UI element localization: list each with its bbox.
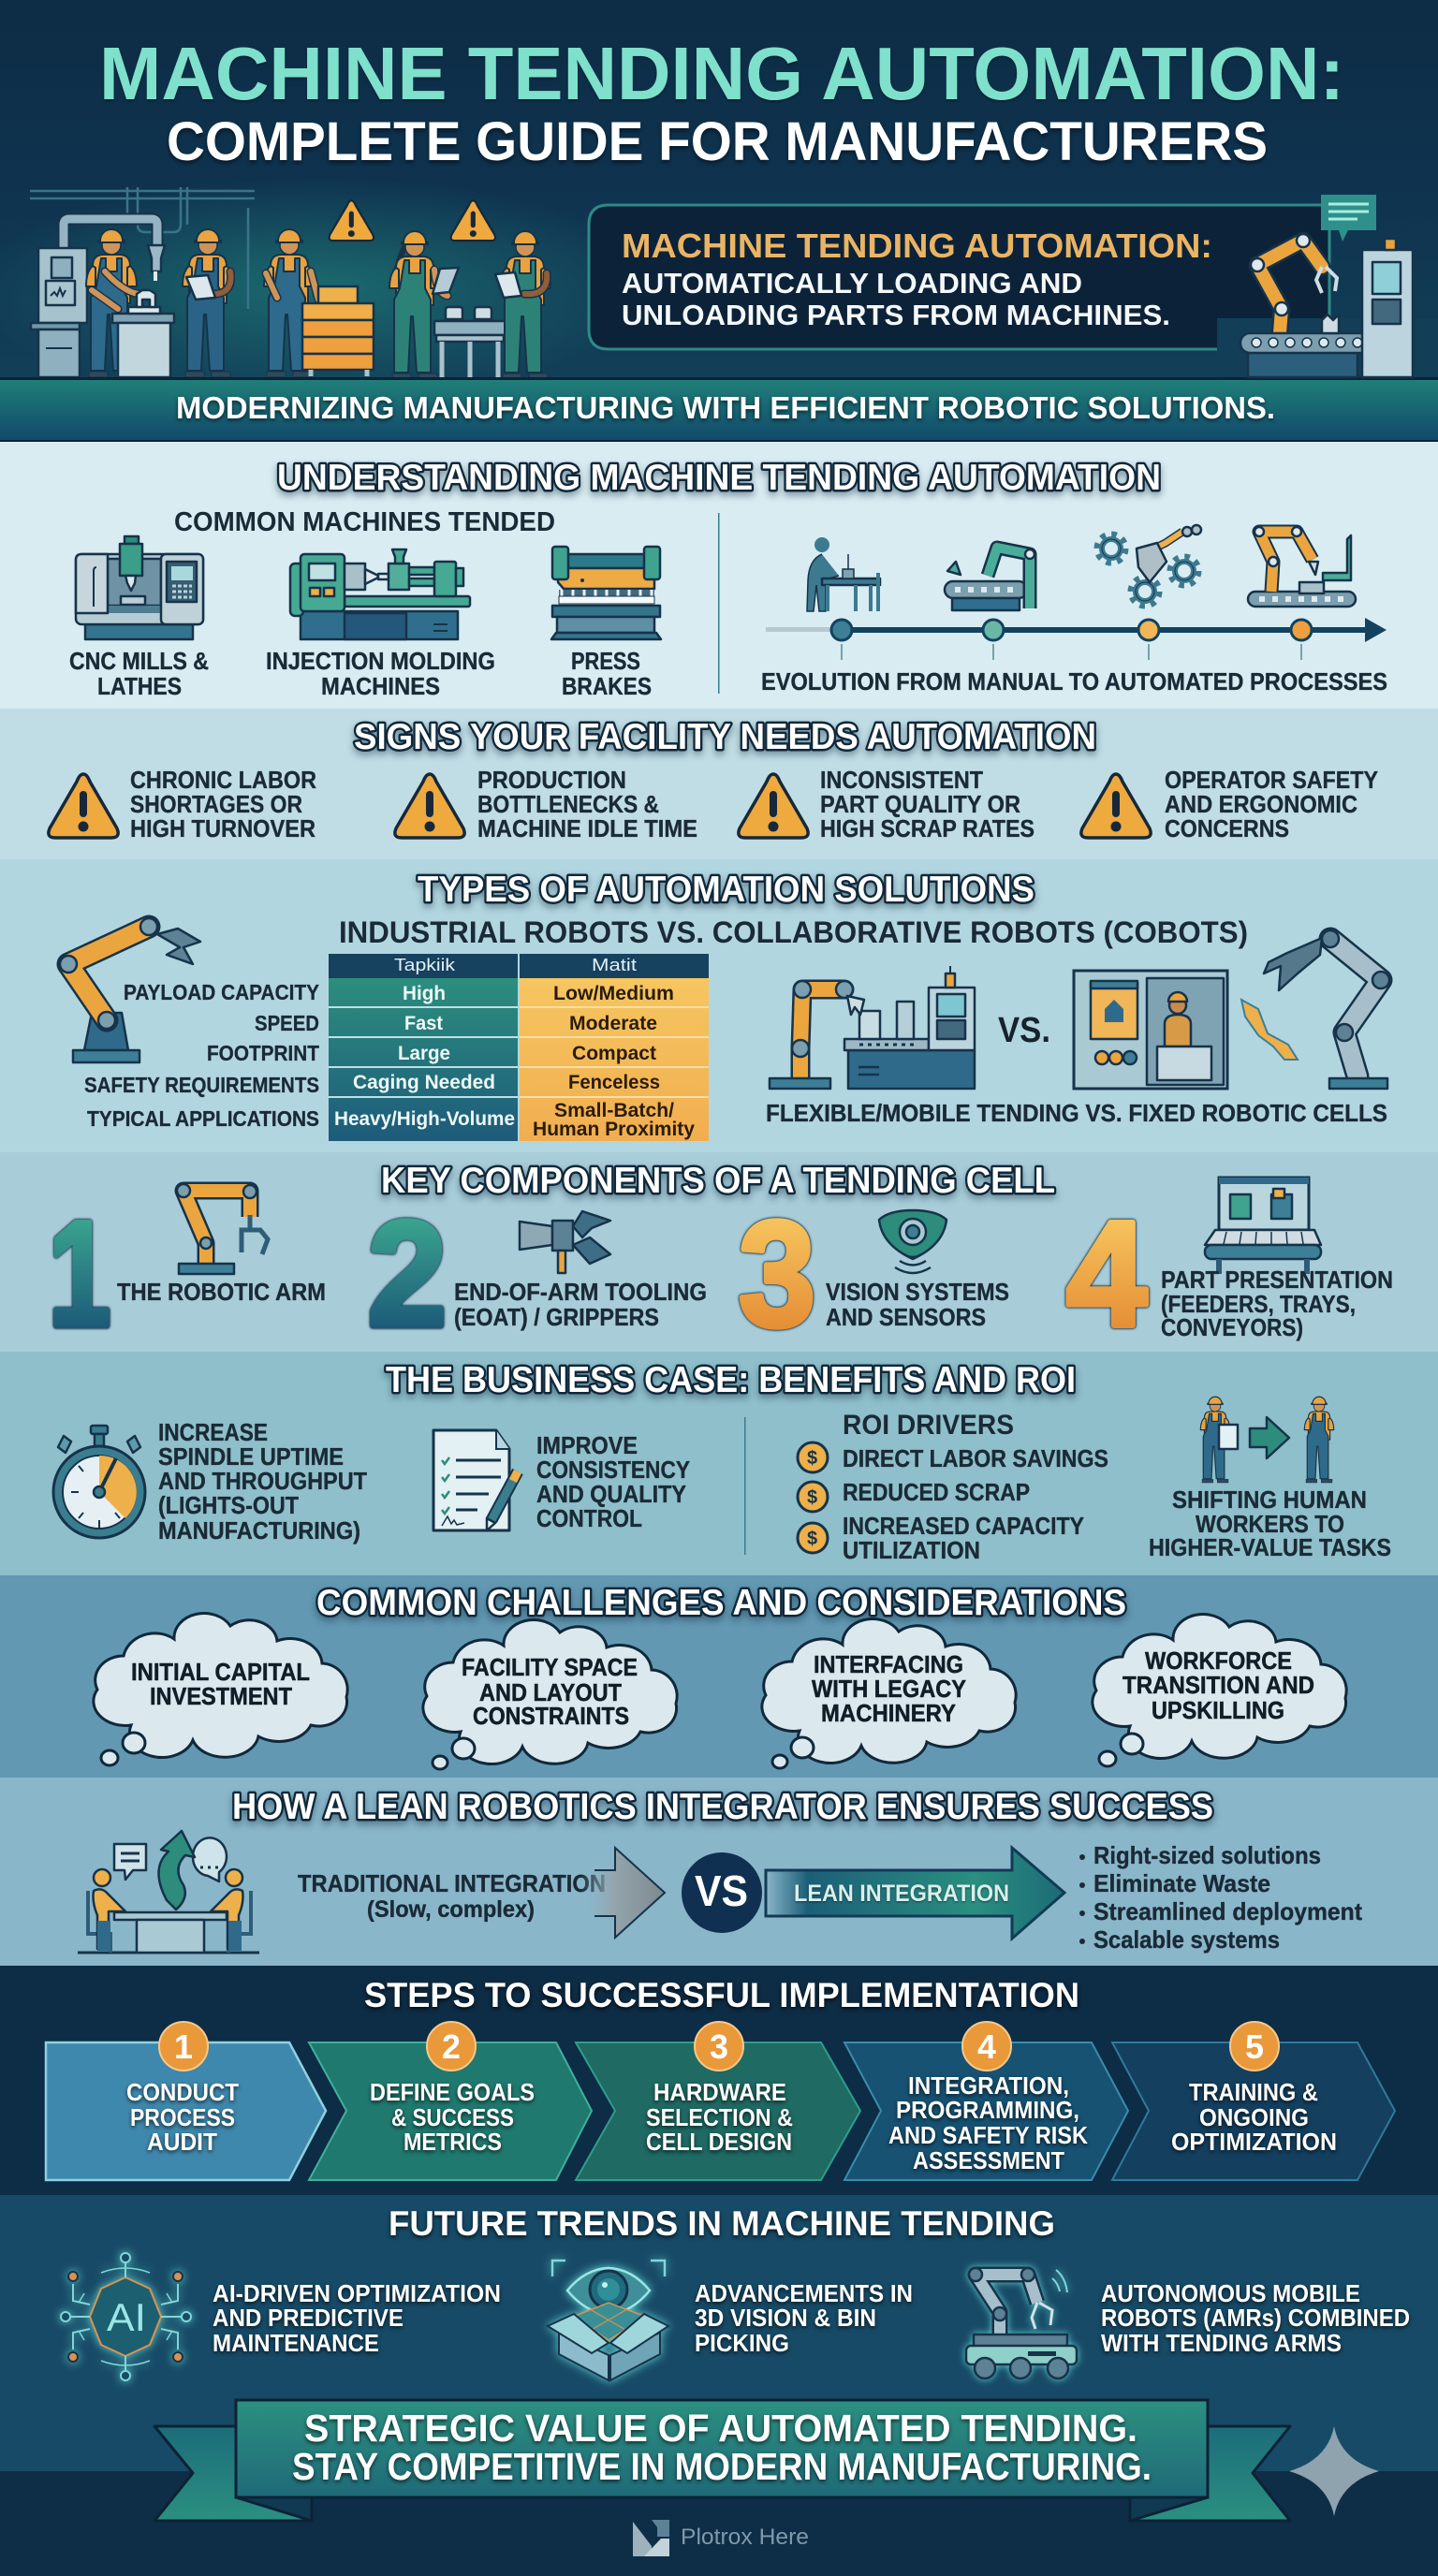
label: CNC mills and lathes	[69, 647, 209, 700]
step 4: INTEGRATION,	[908, 2071, 1069, 2100]
thought bubble: workforce transition: UPSKILLING	[1152, 1696, 1284, 1724]
icon: gears and arm	[1097, 525, 1201, 606]
subheading: industrial vs collaborative: INDUSTRIAL ROBOTS VS. COLLABORATIVE ROBOTS (COBOTS)	[339, 915, 1248, 949]
panel: header	[0, 0, 1438, 380]
step 1	[46, 2022, 326, 2180]
label: vision systems: VISION SYSTEMS	[826, 1278, 1009, 1306]
icon: robotic arm	[177, 1184, 268, 1274]
label: end of arm tooling: END-OF-ARM TOOLING	[454, 1278, 707, 1306]
panel: business case	[0, 1352, 1438, 1575]
heading: KEY COMPONENTS OF A TENDING CELL	[381, 1161, 1055, 1201]
text: labor shortages	[130, 766, 316, 842]
list: lean benefits	[1079, 1841, 1362, 1954]
text: improve consistency: CONTROL	[536, 1504, 642, 1532]
step 4: PROGRAMMING,	[896, 2096, 1079, 2124]
icon: manual worker at bench	[807, 537, 880, 611]
text: AMRs: WITH TENDING ARMS	[1101, 2329, 1342, 2357]
step 3: 3	[710, 2027, 728, 2066]
step 2: DEFINE GOALS	[370, 2078, 535, 2106]
text: improve consistency: CONSISTENCY	[536, 1456, 690, 1484]
label: traditional integration: (Slow, complex)	[367, 1896, 535, 1923]
table: robot comparison: Matit	[592, 956, 637, 974]
label: press brakes: BRAKES	[562, 672, 652, 700]
step 1: CONDUCT	[126, 2078, 239, 2106]
text: 3D vision and bin picking	[695, 2279, 913, 2357]
step 5: 5	[1245, 2027, 1264, 2066]
thought bubble: facility space: FACILITY SPACE	[462, 1653, 638, 1681]
heading: STEPS TO SUCCESSFUL IMPLEMENTATION	[364, 1976, 1079, 2014]
panel: future trends	[0, 2195, 1438, 2471]
list: ROI drivers: INCREASED CAPACITY	[843, 1512, 1084, 1540]
label: injection molding machines: MACHINES	[321, 672, 440, 700]
step 4: 4	[977, 2027, 996, 2066]
text: bottlenecks: BOTTLENECKS &	[477, 790, 659, 818]
step 3	[576, 2022, 860, 2180]
icon: CNC mill	[76, 536, 203, 639]
text: VS.: VS.	[998, 1011, 1050, 1050]
icon: automated orange robot	[1248, 527, 1356, 607]
text: 3D vision and bin picking: PICKING	[695, 2329, 789, 2357]
table: robot comparison: Tapkiik	[394, 956, 456, 974]
icon: parts conveyor	[1205, 1178, 1321, 1274]
icon: flexible robot with machine	[770, 966, 975, 1089]
label: shifting human workers: HIGHER-VALUE TASKS	[1149, 1533, 1391, 1561]
label: shifting human workers: SHIFTING HUMAN	[1172, 1486, 1367, 1514]
chart: evolution timeline	[766, 618, 1387, 660]
ribbon: strategic value: STAY COMPETITIVE IN MODERN MANUFACTURING.	[292, 2445, 1152, 2488]
title line 1: MACHINE TENDING AUTOMATION:	[99, 32, 1344, 115]
label: CNC mills and lathes: CNC MILLS &	[69, 647, 209, 675]
callout heading: MACHINE TENDING AUTOMATION:	[622, 227, 1212, 265]
table row labels: TYPICAL APPLICATIONS	[87, 1106, 319, 1131]
table: robot comparison: High	[403, 983, 446, 1004]
text: operator safety: CONCERNS	[1165, 814, 1289, 842]
text: increase spindle uptime	[158, 1418, 367, 1544]
thought bubble: facility space: AND LAYOUT	[479, 1678, 622, 1706]
text: bottlenecks: PRODUCTION	[477, 766, 626, 794]
icon: AI chip	[61, 2253, 191, 2380]
icon: early conveyor robot	[945, 548, 1034, 610]
step 3: HARDWARE	[653, 2078, 786, 2106]
table row labels: FOOTPRINT	[207, 1041, 319, 1065]
arrow: lean integration: LEAN INTEGRATION	[794, 1881, 1009, 1907]
number 4: 4	[1066, 1190, 1147, 1357]
text: labor shortages: CHRONIC LABOR	[130, 766, 316, 794]
title line 2: COMPLETE GUIDE FOR MANUFACTURERS	[167, 111, 1268, 172]
list: ROI drivers: $	[807, 1529, 817, 1549]
panel: footer background	[0, 2471, 1438, 2576]
table: robot comparison: Heavy/High-Volume	[334, 1108, 515, 1130]
step 4	[844, 2022, 1128, 2180]
label: traditional integration: TRADITIONAL INTEGRATION	[298, 1869, 606, 1897]
thought bubble: workforce transition	[1093, 1615, 1346, 1766]
text: improve consistency: IMPROVE	[536, 1431, 638, 1459]
icon: warning 4	[1081, 774, 1151, 838]
icon: injection molding machine	[290, 549, 470, 639]
callout text line 1: AUTOMATICALLY LOADING AND	[622, 267, 1082, 300]
logo: Plotrox Here	[633, 2520, 809, 2556]
list: ROI drivers: $	[807, 1487, 817, 1508]
list: lean benefits: Eliminate Waste	[1093, 1869, 1270, 1897]
text: 3D vision and bin picking: 3D VISION & BIN	[695, 2304, 876, 2332]
step 1: 1	[174, 2027, 193, 2066]
text: operator safety	[1165, 766, 1378, 842]
label: vision systems: AND SENSORS	[826, 1303, 986, 1331]
table: robot comparison: Human Proximity	[533, 1119, 695, 1140]
number 1: 1	[49, 1190, 110, 1357]
arrow: traditional	[580, 1848, 665, 1938]
thought bubble: facility space	[423, 1620, 677, 1769]
step 2	[309, 2022, 592, 2180]
icon: autonomous mobile robot	[966, 2268, 1077, 2378]
list: lean benefits: Streamlined deployment	[1093, 1897, 1362, 1925]
table: robot comparison: Small-Batch/	[554, 1100, 674, 1121]
text: increase spindle uptime: AND THROUGHPUT	[158, 1467, 367, 1495]
text: inconsistent quality: INCONSISTENT	[820, 766, 983, 794]
step 2: & SUCCESS	[391, 2103, 514, 2131]
banner: modernizing manufacturing: MODERNIZING MANUFACTURING WITH EFFICIENT ROBOTIC SOLUTIONS.	[176, 390, 1275, 425]
text: 3D vision and bin picking: ADVANCEMENTS IN	[695, 2279, 913, 2307]
list: ROI drivers: $	[807, 1448, 817, 1469]
step 4: ASSESSMENT	[913, 2146, 1064, 2174]
heading: HOW A LEAN ROBOTICS INTEGRATOR ENSURES SUCCESS	[232, 1787, 1213, 1827]
step 3: SELECTION &	[646, 2103, 793, 2131]
text: AI-driven optimization: AND PREDICTIVE	[213, 2304, 404, 2332]
step 1: PROCESS	[130, 2103, 235, 2131]
text: improve consistency	[536, 1431, 690, 1532]
label: injection molding machines: INJECTION MOLDING	[266, 647, 495, 675]
label: press brakes: PRESS	[571, 647, 640, 675]
list: ROI drivers: UTILIZATION	[843, 1536, 980, 1564]
label: end of arm tooling: (EOAT) / GRIPPERS	[454, 1303, 659, 1331]
icon: warning 3	[739, 774, 808, 838]
text: operator safety: AND ERGONOMIC	[1165, 790, 1357, 818]
icon: 3D vision bin	[548, 2261, 668, 2380]
badge: VS: VS	[695, 1866, 748, 1915]
text: increase spindle uptime: (LIGHTS-OUT	[158, 1491, 299, 1519]
icon: fixed robotic cell	[1074, 971, 1227, 1089]
heading: ROI drivers: ROI DRIVERS	[843, 1410, 1014, 1441]
icon: team meeting	[78, 1831, 259, 1953]
heading: TYPES OF AUTOMATION SOLUTIONS	[418, 870, 1034, 910]
thought bubble: legacy machinery: WITH LEGACY	[812, 1675, 966, 1703]
label: vision systems	[826, 1278, 1009, 1331]
thought bubble: legacy machinery: MACHINERY	[821, 1699, 956, 1727]
heading: THE BUSINESS CASE: BENEFITS AND ROI	[386, 1360, 1076, 1400]
icon: sparkle star	[1289, 2426, 1379, 2516]
text: bottlenecks	[477, 766, 697, 842]
text: inconsistent quality	[820, 766, 1034, 842]
banner: modernizing manufacturing	[0, 380, 1438, 440]
text: operator safety: OPERATOR SAFETY	[1165, 766, 1378, 794]
icon: warning 1	[49, 774, 118, 838]
icon: warning 2	[395, 774, 464, 838]
panel: signs your facility needs automation	[0, 709, 1438, 859]
table: robot comparison: Fenceless	[568, 1072, 660, 1093]
badge: VS	[682, 1852, 762, 1933]
illustration: workers on factory floor	[0, 187, 1438, 380]
ribbon: strategic value: STRATEGIC VALUE OF AUTOMATED TENDING.	[304, 2407, 1137, 2450]
icon: industrial robot arm	[60, 918, 200, 1062]
panel: lean robotics integrator	[0, 1778, 1438, 1966]
subheading: common machines tended: COMMON MACHINES TENDED	[174, 507, 555, 537]
table: robot comparison	[329, 954, 709, 1141]
icon: worker shifted to higher-value tasks	[1200, 1397, 1334, 1483]
label: the robotic arm: THE ROBOTIC ARM	[117, 1278, 326, 1306]
label: part presentation: CONVEYORS)	[1161, 1313, 1303, 1341]
step 5: TRAINING &	[1189, 2078, 1318, 2106]
text: increase spindle uptime: MANUFACTURING)	[158, 1516, 360, 1544]
thought bubble: initial capital: INVESTMENT	[150, 1682, 292, 1710]
heading: SIGNS YOUR FACILITY NEEDS AUTOMATION	[354, 717, 1096, 757]
number 2: 2	[368, 1190, 447, 1357]
label: shifting human workers	[1149, 1486, 1391, 1561]
text: AI-driven optimization	[213, 2279, 501, 2357]
label: end of arm tooling	[454, 1278, 707, 1331]
label: press brakes	[562, 647, 652, 700]
callout text line 2: UNLOADING PARTS FROM MACHINES.	[622, 299, 1170, 331]
text: increase spindle uptime: SPINDLE UPTIME	[158, 1442, 344, 1471]
icon: gripper	[520, 1211, 610, 1273]
panel: understanding machine tending automation	[0, 440, 1438, 709]
text: AI-driven optimization: AI-DRIVEN OPTIMIZATION	[213, 2279, 501, 2307]
number 3: 3	[739, 1190, 815, 1357]
icon: press brake	[551, 547, 661, 639]
icon: AI chip: AI	[107, 2295, 146, 2339]
label: injection molding machines	[266, 647, 495, 700]
table: robot comparison: Low/Medium	[553, 983, 674, 1004]
arrow: lean integration	[766, 1848, 1064, 1939]
icon: stopwatch	[53, 1426, 145, 1538]
heading: UNDERSTANDING MACHINE TENDING AUTOMATION	[277, 458, 1161, 498]
text: inconsistent quality: HIGH SCRAP RATES	[820, 814, 1034, 842]
ribbon: strategic value	[154, 2400, 1290, 2521]
panel: types of automation solutions	[0, 859, 1438, 1152]
step 5: ONGOING	[1199, 2103, 1309, 2131]
text: labor shortages: SHORTAGES OR	[130, 790, 302, 818]
text: AMRs: ROBOTS (AMRs) COMBINED	[1101, 2304, 1410, 2332]
table: robot comparison: Large	[398, 1043, 450, 1064]
illustration: robot at conveyor with control panel	[1217, 195, 1438, 377]
heading: COMMON CHALLENGES AND CONSIDERATIONS	[316, 1583, 1126, 1623]
logo: Plotrox Here: Plotrox Here	[681, 2525, 809, 2550]
step 1: AUDIT	[147, 2128, 217, 2156]
table row labels: SPEED	[255, 1011, 319, 1035]
text: AMRs: AUTONOMOUS MOBILE	[1101, 2279, 1360, 2307]
heading: FUTURE TRENDS IN MACHINE TENDING	[389, 2204, 1055, 2243]
list: lean benefits: Right-sized solutions	[1093, 1841, 1321, 1869]
label: part presentation	[1161, 1266, 1393, 1341]
text: AI-driven optimization: MAINTENANCE	[213, 2329, 379, 2357]
step 4: AND SAFETY RISK	[888, 2121, 1088, 2149]
label: part presentation: (FEEDERS, TRAYS,	[1161, 1290, 1356, 1318]
panel: steps to successful implementation	[0, 1966, 1438, 2195]
thought bubble: legacy machinery	[762, 1619, 1016, 1768]
thought bubble: facility space: CONSTRAINTS	[473, 1702, 629, 1730]
icon: checklist document	[433, 1430, 518, 1530]
label: part presentation: PART PRESENTATION	[1161, 1266, 1393, 1294]
table row labels: SAFETY REQUIREMENTS	[84, 1073, 319, 1097]
icon: gray cobot arm	[1241, 930, 1389, 1089]
list: lean benefits: Scalable systems	[1093, 1925, 1280, 1954]
text: bottlenecks: MACHINE IDLE TIME	[477, 814, 697, 842]
text: improve consistency: AND QUALITY	[536, 1480, 686, 1508]
list: ROI drivers: REDUCED SCRAP	[843, 1478, 1030, 1506]
panel: key components of a tending cell	[0, 1152, 1438, 1357]
thought bubble: initial capital	[94, 1614, 347, 1765]
label: evolution from manual to automated: EVOLUTION FROM MANUAL TO AUTOMATED PROCESSES	[761, 667, 1387, 695]
thought bubble: legacy machinery: INTERFACING	[814, 1650, 963, 1678]
thought bubble: initial capital: INITIAL CAPITAL	[131, 1658, 310, 1686]
list: ROI drivers: DIRECT LABOR SAVINGS	[843, 1444, 1108, 1472]
text: AMRs	[1101, 2279, 1410, 2357]
table: robot comparison: Compact	[572, 1043, 656, 1064]
label: flexible vs fixed: FLEXIBLE/MOBILE TENDING VS. FIXED ROBOTIC CELLS	[766, 1099, 1387, 1127]
thought bubble: workforce transition: WORKFORCE	[1145, 1647, 1292, 1675]
text: inconsistent quality: PART QUALITY OR	[820, 790, 1020, 818]
label: traditional integration	[298, 1869, 606, 1923]
list: ROI drivers	[798, 1442, 1108, 1564]
label: shifting human workers: WORKERS TO	[1196, 1510, 1344, 1538]
label: CNC mills and lathes: LATHES	[97, 672, 182, 700]
table: robot comparison: Caging Needed	[353, 1072, 495, 1093]
text: labor shortages: HIGH TURNOVER	[130, 814, 315, 842]
text: increase spindle uptime: INCREASE	[158, 1418, 268, 1446]
table row labels: PAYLOAD CAPACITY	[124, 980, 319, 1004]
table: robot comparison: Fast	[404, 1013, 443, 1034]
thought bubble: workforce transition: TRANSITION AND	[1123, 1671, 1314, 1699]
icon: vision sensor	[879, 1210, 946, 1273]
step 2: 2	[442, 2027, 461, 2066]
step 5	[1112, 2022, 1395, 2180]
table: robot comparison: Moderate	[569, 1013, 657, 1034]
step 3: CELL DESIGN	[646, 2128, 792, 2156]
step 2: METRICS	[404, 2128, 502, 2156]
callout: definition	[589, 205, 1329, 349]
table row labels	[84, 980, 319, 1131]
panel: common challenges	[0, 1575, 1438, 1778]
step 5: OPTIMIZATION	[1171, 2128, 1337, 2156]
